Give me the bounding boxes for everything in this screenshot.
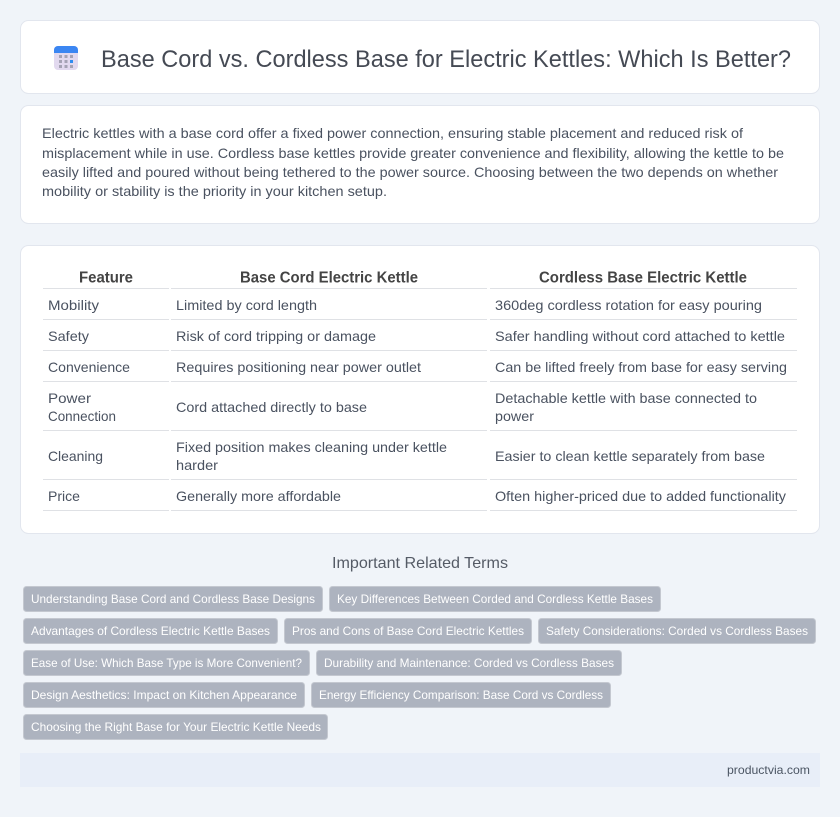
row: convenience: Can be lifted freely from base for easy serving [495,359,787,375]
row: price: Often higher-priced due to added functionality [495,488,786,504]
intro text: mobility or stability is the priority in your kitchen setup. [42,183,387,199]
table header: Feature [79,270,133,286]
tag: Choosing the Right Base for Your Electric Kettle Needs [31,720,321,734]
heading: important related terms: Important Related Terms [332,555,508,572]
tag [316,650,622,676]
row: cleaning: Cleaning [48,448,103,464]
intro text: Electric kettles with a base cord offer a fixed power connection, ensuring stable placement and reduced risk of [42,125,743,141]
row: mobility [43,297,797,320]
tag: Energy Efficiency Comparison: Base Cord vs Cordless [319,688,603,702]
intro text [42,125,784,199]
table header: Cordless Base Electric Kettle [539,270,747,286]
table header [43,270,797,288]
row: cleaning: Fixed position makes cleaning under kettle [176,439,447,455]
intro text: misplacement while in use. Cordless base kettles provide greater convenience and flexibility, allowing the kettle to be [42,145,784,161]
row: cleaning: Easier to clean kettle separately from base [495,448,765,464]
row: convenience: Requires positioning near power outlet [176,359,421,375]
row: power connection: Detachable kettle with base connected to [495,390,757,406]
table header: Base Cord Electric Kettle [240,270,418,286]
tag [24,682,304,708]
tag: Safety Considerations: Corded vs Cordless Bases [546,624,808,638]
title: Base Cord vs. Cordless Base for Electric Kettles: Which Is Better? [101,46,791,73]
tag [330,586,660,612]
tag [312,682,610,708]
row: power connection: power [495,408,534,424]
row: power connection [43,390,797,430]
tag [24,618,278,644]
tag [284,618,532,644]
row: safety: Safer handling without cord attached to kettle [495,328,785,344]
row: price [43,488,797,510]
footer [20,753,820,787]
row: mobility: 360deg cordless rotation for easy pouring [495,297,762,313]
tag [24,586,322,612]
row: power connection: Connection [48,408,116,424]
row: convenience: Convenience [48,359,130,375]
panel: comparison table [20,246,820,534]
row: price: Price [48,488,80,504]
row: safety: Risk of cord tripping or damage [176,328,376,344]
intro text: easily lifted and poured without being tethered to the power source. Choosing between the two depends on whether [42,164,778,180]
tag: Pros and Cons of Base Cord Electric Kettles [292,624,524,638]
tag [538,618,816,644]
icon: calendar [54,46,78,70]
tag: Design Aesthetics: Impact on Kitchen Appearance [31,688,297,702]
row: power connection: Power [48,390,91,406]
row: safety: Safety [48,328,89,344]
panel: introduction [20,106,820,224]
row: cleaning [43,439,797,480]
tag: Durability and Maintenance: Corded vs Cordless Bases [324,656,614,670]
row: price: Generally more affordable [176,488,341,504]
panel: header [20,20,820,94]
tag [24,650,310,676]
tag: Ease of Use: Which Base Type is More Convenient? [31,656,302,670]
row: convenience [43,359,797,382]
tag [24,714,328,740]
row: cleaning: harder [176,457,218,473]
row: safety [43,328,797,350]
footer: productvia.com [727,763,810,777]
tag: Key Differences Between Corded and Cordless Kettle Bases [337,592,653,606]
related term tags [24,586,816,740]
row: mobility: Mobility [48,297,99,313]
tag: Advantages of Cordless Electric Kettle Bases [31,624,270,638]
row: power connection: Cord attached directly to base [176,399,367,415]
tag: Understanding Base Cord and Cordless Base Designs [31,592,315,606]
row: mobility: Limited by cord length [176,297,317,313]
